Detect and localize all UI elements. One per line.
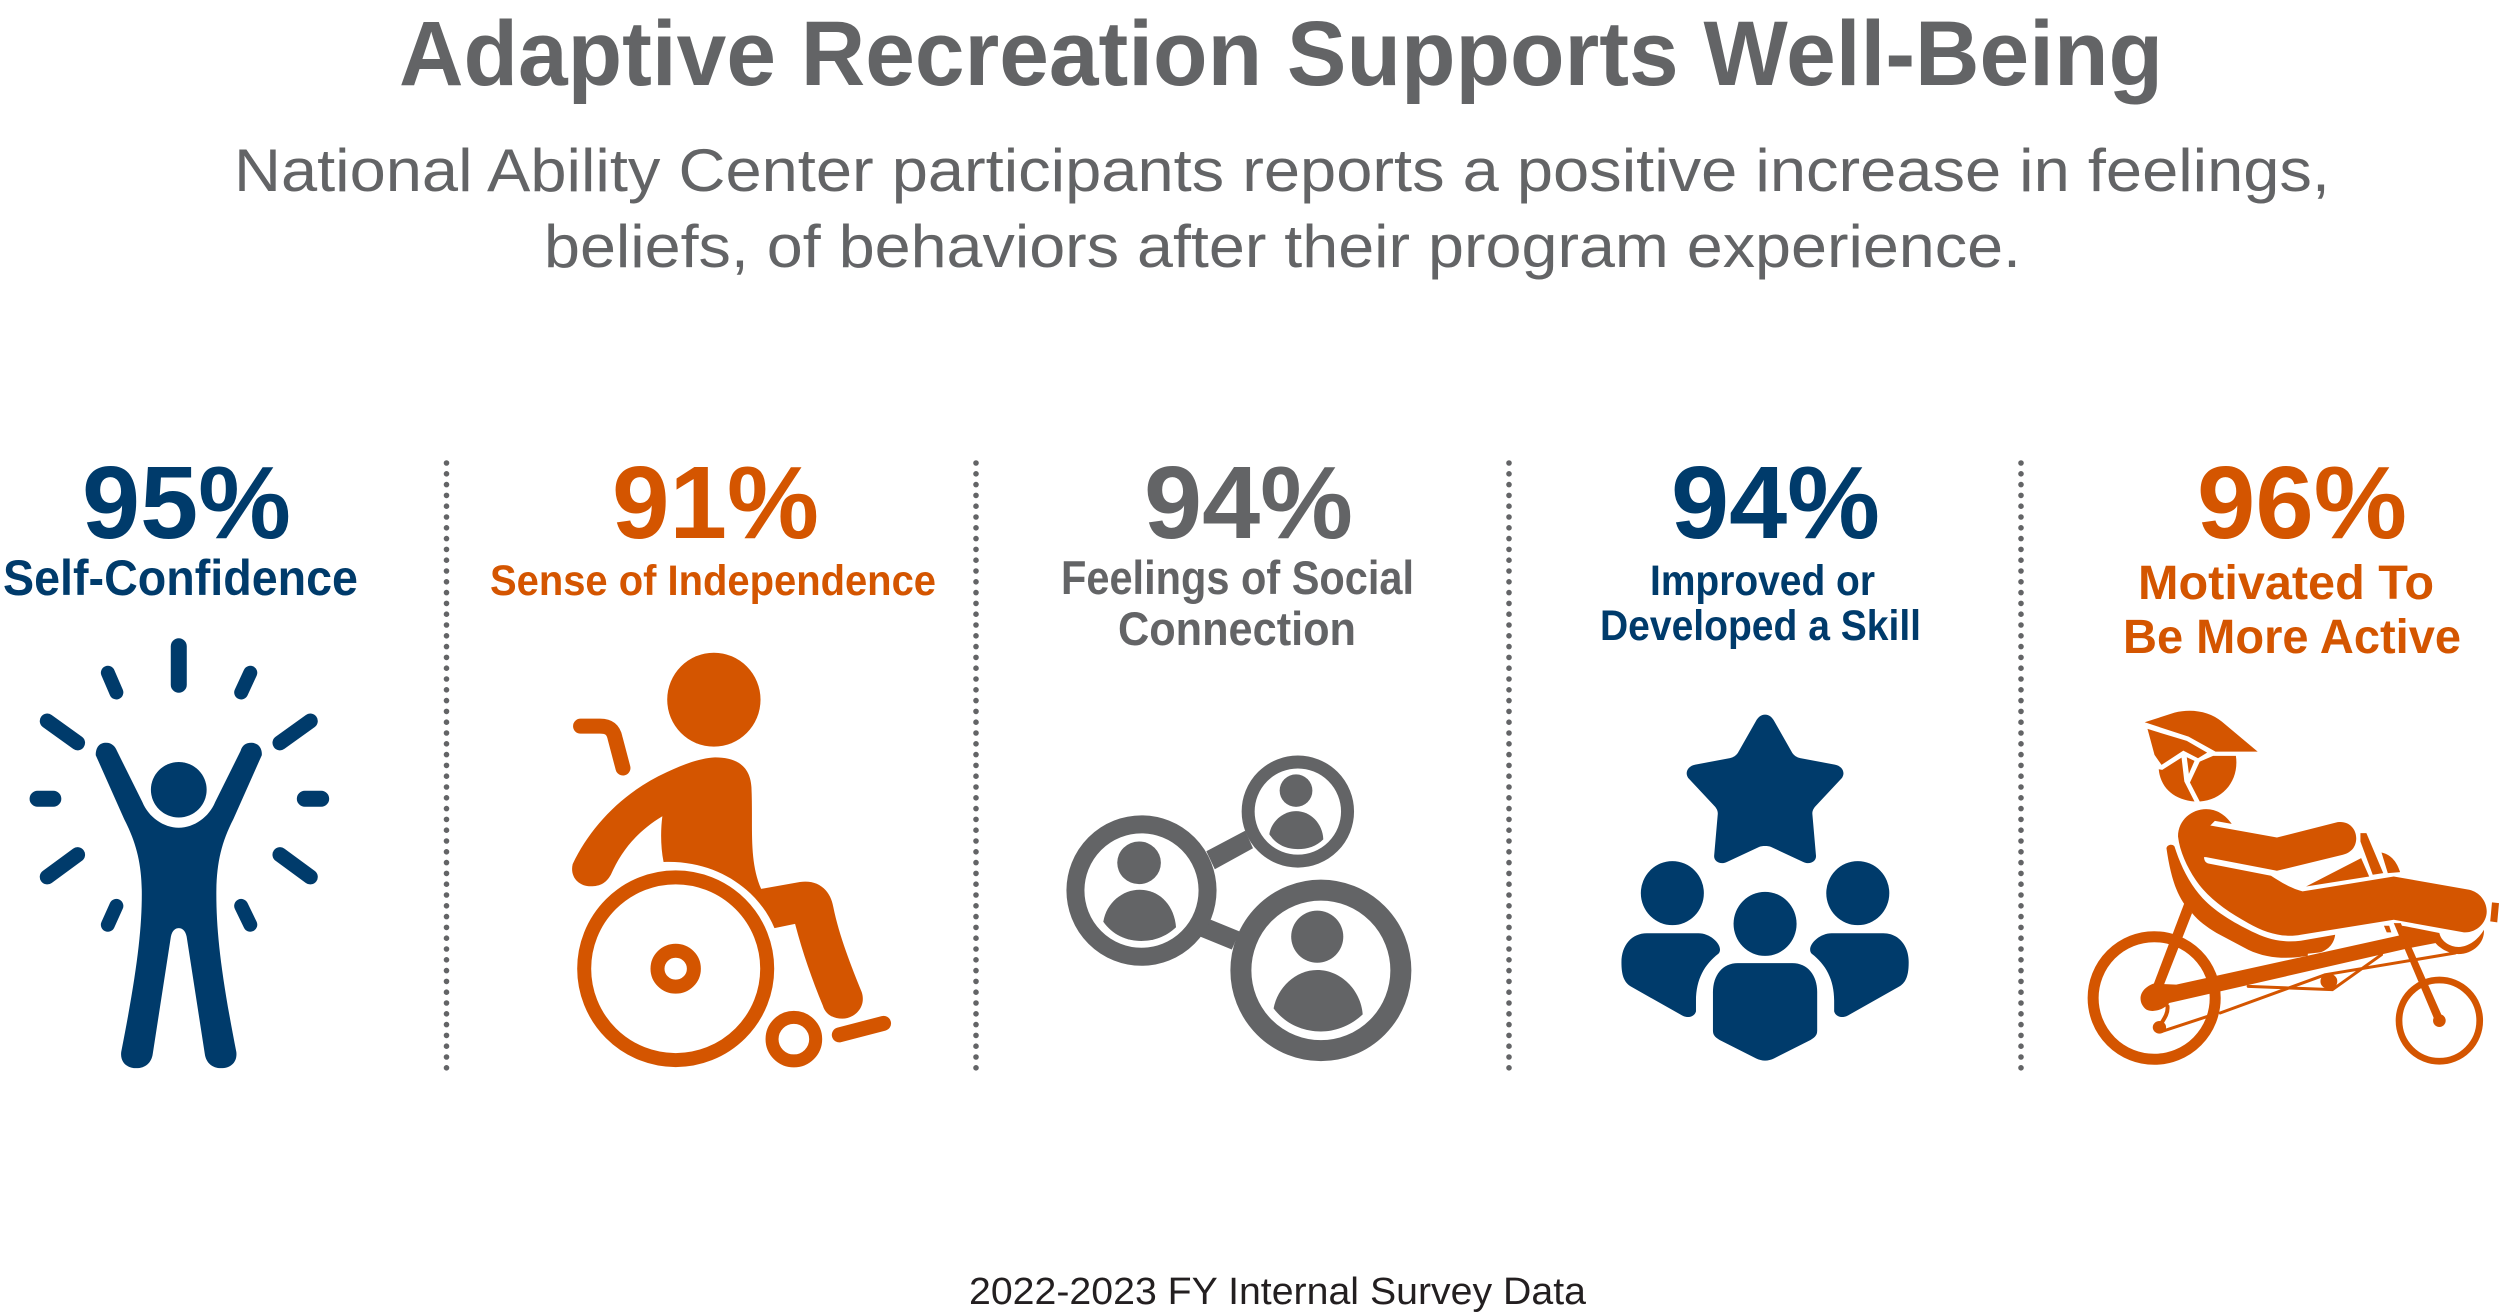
panel: improved or developed a skill [1600, 445, 1921, 1061]
label: improved or developed a skill [1600, 557, 1921, 650]
label: feelings of social connection: Connection [1118, 602, 1356, 655]
label: feelings of social connection: Feelings of Social [1061, 551, 1414, 604]
stat: 94% navy: 94% [1671, 445, 1880, 560]
label: sense of independence: Sense of Independence [490, 557, 936, 605]
label: improved or developed a skill: Improved or [1650, 557, 1875, 605]
panel: feelings of social connection [1061, 445, 1414, 1051]
stat: 96%: 96% [2197, 445, 2407, 560]
icon: recumbent cyclist [2093, 711, 2499, 1061]
label: motivated to be more active: Motivated To [2138, 557, 2434, 610]
label: feelings of social connection [1061, 551, 1414, 655]
dotted dividers [446, 463, 2021, 1068]
label: improved or developed a skill: Developed a Skill [1600, 602, 1921, 650]
label: motivated to be more active: Be More Active [2123, 611, 2461, 664]
icon: wheelchair user [572, 653, 884, 1061]
subtitle [234, 137, 2330, 280]
icon: connected people [1075, 762, 1401, 1051]
title: Adaptive Recreation Supports Well-Being [399, 3, 2163, 105]
subtitle: beliefs, of behaviors after their program experience. [544, 213, 2021, 280]
stat: 94% grey: 94% [1144, 445, 1353, 560]
stat: 91%: 91% [612, 445, 819, 560]
label: self-confidence: Self-Confidence [3, 550, 358, 606]
icon: star over group [1621, 715, 1909, 1061]
panel: sense of independence [490, 445, 936, 1061]
panel: motivated to be more active [2093, 445, 2499, 1061]
panel: self-confidence [3, 445, 358, 1068]
stat: 95%: 95% [82, 445, 291, 560]
footer source note: 2022-2023 FY Internal Survey Data [969, 1271, 1587, 1313]
subtitle: National Ability Center participants reports a positive increase in feelings, [234, 137, 2330, 204]
icon: person with raised arms [38, 646, 321, 1068]
label: motivated to be more active [2123, 557, 2461, 664]
